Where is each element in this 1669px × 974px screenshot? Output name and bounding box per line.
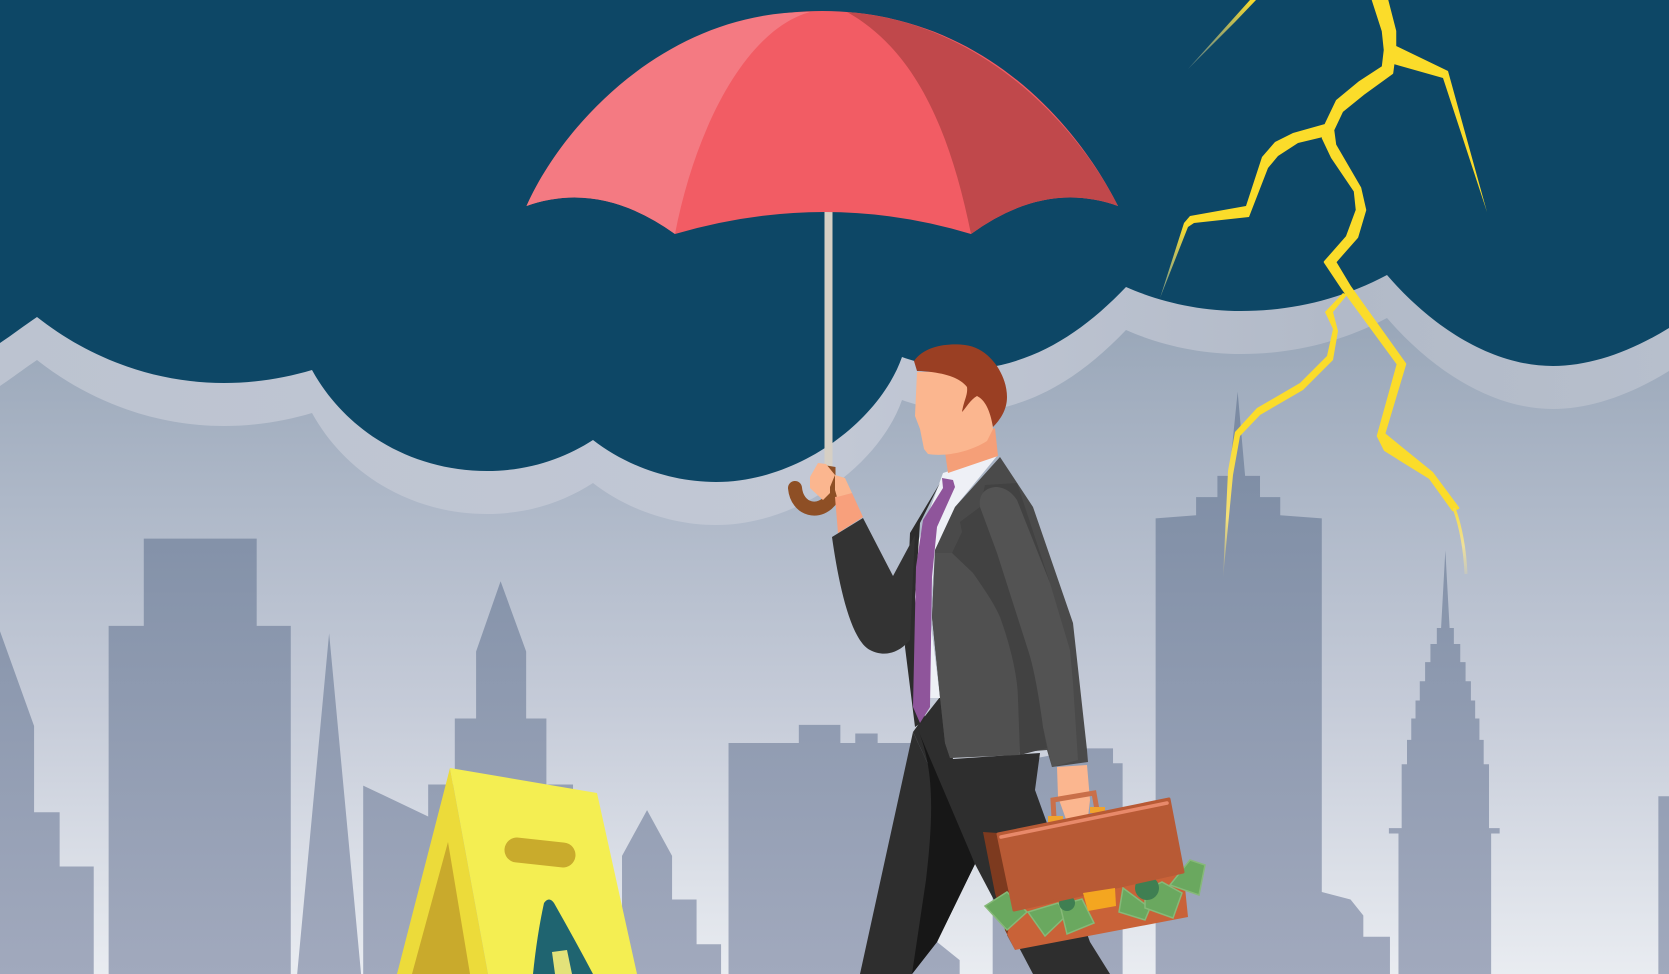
case lid xyxy=(998,799,1183,910)
trousers xyxy=(860,697,1110,974)
lightning bolt xyxy=(1160,0,1487,578)
sign inner shadow xyxy=(412,842,470,974)
briefcase hand xyxy=(1057,765,1090,822)
sign side xyxy=(397,768,488,974)
neck xyxy=(945,428,998,473)
businessman xyxy=(810,344,1110,974)
umbrella xyxy=(526,11,1118,509)
umbrella canopy xyxy=(526,11,1118,234)
clasp xyxy=(1083,888,1116,911)
shirt xyxy=(913,456,997,698)
case back and lower body xyxy=(983,832,1188,950)
dark jacket front xyxy=(905,483,940,727)
umbrella shaft xyxy=(824,210,832,468)
briefcase with money xyxy=(983,793,1205,950)
face xyxy=(915,372,993,455)
sign front xyxy=(450,768,637,974)
briefcase handle xyxy=(1048,793,1105,822)
wrist and hand holding umbrella xyxy=(810,463,863,533)
skyline buildings xyxy=(0,392,1669,974)
wet floor sign xyxy=(397,768,637,974)
lid highlight xyxy=(1001,803,1167,837)
umbrella handle xyxy=(795,469,832,509)
warning triangle xyxy=(533,900,593,974)
cloud light band xyxy=(0,43,1669,525)
raised arm sleeve xyxy=(832,518,915,654)
dark storm cloud xyxy=(0,0,1669,482)
suit jacket xyxy=(932,457,1088,767)
sign slot xyxy=(517,850,563,855)
banknotes xyxy=(985,860,1205,936)
warning mark xyxy=(552,950,572,974)
tie xyxy=(913,478,955,723)
hair xyxy=(914,344,1007,427)
